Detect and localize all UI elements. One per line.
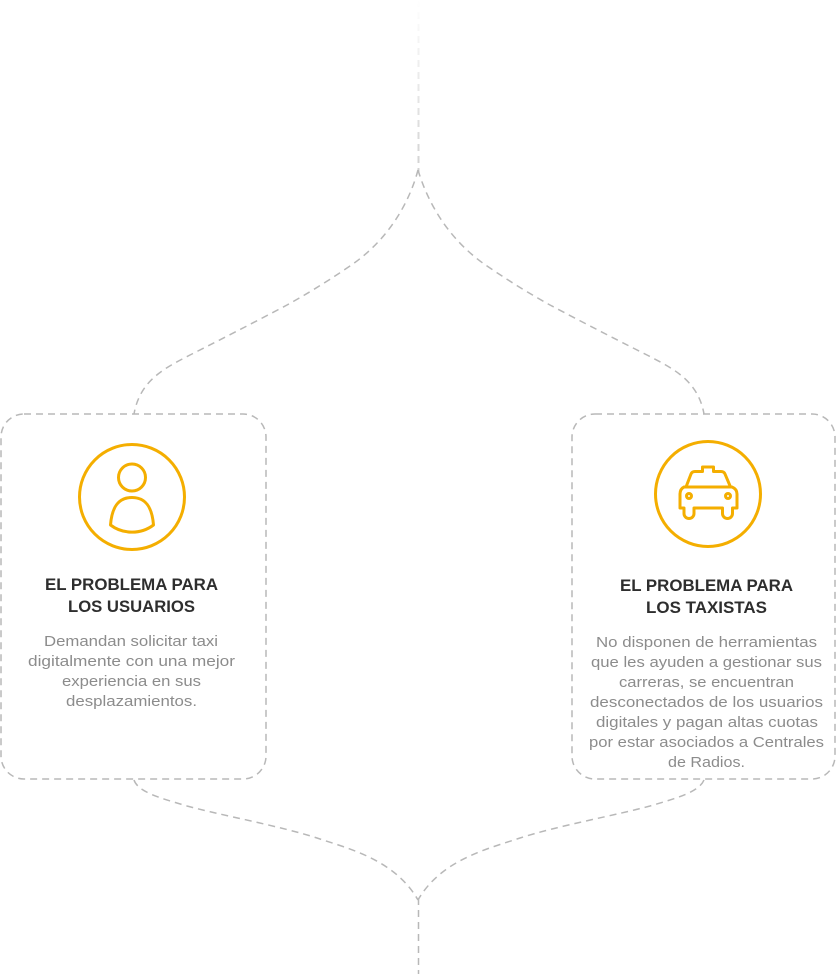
connector: bottom line xyxy=(418,898,420,974)
heading: drivers xyxy=(620,577,793,617)
panel border: users xyxy=(1,414,266,779)
connector: drivers to bottom merge xyxy=(418,780,704,900)
icon: user xyxy=(80,444,184,550)
heading: drivers: LOS TAXISTAS xyxy=(646,599,767,617)
heading: drivers: EL PROBLEMA PARA xyxy=(620,577,793,595)
heading: users: EL PROBLEMA PARA xyxy=(45,576,218,594)
text block: users: Demandan solicitar taxi xyxy=(44,633,218,650)
connector: top fading line xyxy=(418,0,420,172)
text block: users: digitalmente con una mejor xyxy=(28,653,235,670)
heading: users: LOS USUARIOS xyxy=(68,598,195,616)
panel: drivers xyxy=(572,414,835,779)
text block: drivers: por estar asociados a Centrales xyxy=(589,734,824,751)
icon: taxi xyxy=(656,442,760,546)
text block: drivers: No disponen de herramientas xyxy=(596,634,817,651)
text block: drivers: que les ayuden a gestionar sus xyxy=(591,654,822,671)
panel border: drivers xyxy=(572,414,835,779)
text block: drivers xyxy=(589,634,824,771)
text block: drivers: digitales y pagan altas cuotas xyxy=(596,714,818,731)
text block: drivers: carreras, se encuentran xyxy=(619,674,794,691)
text block: drivers: de Radios. xyxy=(668,754,745,771)
text block: users xyxy=(28,633,235,710)
text block: users: desplazamientos. xyxy=(66,693,197,710)
connector: top split to drivers xyxy=(418,170,704,414)
text block: users: experiencia en sus xyxy=(62,673,201,690)
heading: users xyxy=(45,576,218,616)
connector: top split to users xyxy=(134,170,418,414)
connector: users to bottom merge xyxy=(134,780,418,900)
text block: drivers: desconectados de los usuarios xyxy=(590,694,823,711)
panel: users xyxy=(1,414,266,779)
